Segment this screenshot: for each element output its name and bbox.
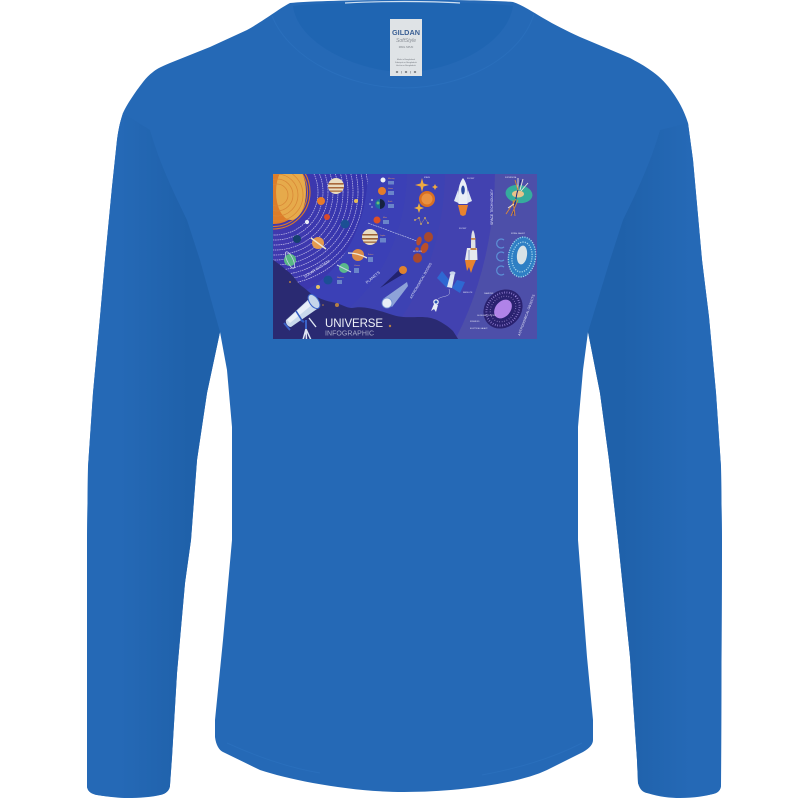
satellite body — [447, 272, 455, 288]
printed infographic panel — [273, 174, 537, 339]
planet labels: Earth — [388, 200, 392, 203]
astronomical objects — [470, 176, 539, 337]
planet: saturn — [348, 249, 367, 261]
label origin text 2: Fabriqué au Bangladesh — [395, 62, 417, 64]
neck opening — [293, 2, 513, 72]
dark hill — [270, 258, 460, 342]
small stars — [289, 281, 391, 327]
telescope tripod — [303, 329, 311, 340]
label style: SoftStyle — [396, 38, 416, 44]
planet: mars — [374, 216, 380, 224]
label: astronomical objects: ASTRONOMICAL OBJECTS — [517, 293, 536, 336]
planet: mercury — [305, 220, 309, 224]
satellite panel right — [452, 280, 465, 293]
band: astronomical bodies — [91, 0, 445, 395]
star small — [432, 184, 438, 190]
astronomical bodies — [413, 176, 438, 263]
planet: neptune — [324, 276, 332, 284]
spiral galaxy — [505, 235, 539, 279]
astronaut — [431, 289, 450, 312]
planet: uranus — [337, 263, 351, 273]
band: space technology — [402, 174, 495, 336]
comet white — [382, 282, 408, 308]
t-shirt — [87, 0, 722, 798]
planet: jupiter — [362, 229, 378, 245]
elliptical galaxy labels — [470, 292, 496, 330]
supernova label: SUPERNOVA — [505, 176, 517, 179]
solar system planets — [283, 178, 358, 269]
divider line to asteroids — [368, 223, 417, 241]
right sleeve shading — [588, 123, 722, 797]
telescope mount — [298, 318, 306, 329]
collar highlight — [345, 2, 460, 3]
elliptical galaxy — [475, 281, 531, 337]
label: space technology: SPACE TECHNOLOGY — [490, 188, 494, 225]
band: planets — [129, 0, 407, 340]
label brand: GILDAN — [392, 28, 420, 37]
orbit lines — [273, 174, 368, 282]
planet: neptune — [340, 220, 350, 228]
planet: earth — [293, 235, 301, 243]
label: solar system: SOLAR SYSTEM — [303, 259, 330, 279]
asteroid label: METEORS — [413, 251, 423, 253]
neck label — [390, 19, 422, 76]
collar rib edge — [272, 14, 534, 88]
planet labels: Uranus — [354, 265, 360, 267]
satellite — [437, 271, 473, 294]
planet labels: Jupiter — [380, 234, 386, 237]
label origin text 3: Hecho en Bangladesh — [396, 65, 416, 67]
planet: venus — [378, 187, 386, 195]
telescope — [284, 281, 391, 340]
rocket two — [465, 230, 478, 273]
planet: jupiter — [328, 178, 344, 194]
telescope band — [296, 311, 303, 322]
planet fact lines — [337, 181, 394, 284]
spiral galaxy label: SPIRAL GALAXY — [511, 232, 526, 235]
panel background: astronomical objects band — [456, 174, 537, 339]
elliptical galaxy labels: ELLIPTICAL GALAXY — [470, 327, 488, 330]
telescope rod — [309, 318, 316, 327]
planet: mercury — [380, 178, 386, 182]
title — [325, 318, 383, 338]
rocket one — [454, 178, 472, 216]
band: solar system — [279, 174, 368, 288]
rocket one label: ROCKET — [467, 178, 475, 180]
planet: pluto — [316, 285, 320, 289]
elliptical galaxy labels: DIAMETER — [484, 292, 494, 295]
planet: earth — [375, 199, 385, 209]
planet: mars — [324, 214, 330, 220]
planet: small yellow — [354, 199, 358, 203]
constellation — [414, 217, 429, 225]
planet: venus — [317, 197, 325, 205]
satellite label: SATELLITE — [463, 291, 473, 294]
rocket two label: ROCKET — [459, 228, 467, 230]
star label: STARS — [424, 176, 431, 179]
orange star body — [419, 191, 435, 207]
star — [415, 178, 429, 192]
planet labels: Venus — [388, 188, 393, 190]
telescope base band — [284, 323, 290, 330]
subtitle: infographic: INFOGRAPHIC — [325, 330, 374, 338]
satellite panel left — [437, 271, 450, 288]
progress rings — [497, 239, 504, 275]
hem stitching — [227, 743, 582, 775]
label: astronomical bodies: ASTRONOMICAL BODIES — [409, 262, 433, 300]
planet labels: Mercury — [388, 178, 395, 180]
label origin text: Made in Bangladesh — [397, 59, 415, 61]
star — [414, 203, 424, 213]
label spun: RING SPUN — [399, 45, 413, 49]
planet labels — [337, 178, 395, 279]
planet: saturn — [311, 237, 326, 249]
section labels — [303, 188, 536, 336]
rockets — [454, 178, 478, 273]
icon: sun — [273, 174, 311, 230]
elliptical galaxy labels: GLOBULAR CLUSTER — [477, 314, 496, 317]
planet labels: Neptune — [337, 276, 344, 279]
supernova — [504, 178, 534, 216]
telescope tube highlight — [287, 299, 313, 323]
telescope lens — [306, 292, 322, 311]
planet labels: Mars — [383, 217, 387, 219]
moons — [369, 199, 373, 208]
label: planets: PLANETS — [365, 270, 381, 285]
satellite head — [450, 271, 456, 275]
planet: uranus — [284, 251, 296, 269]
title: universe: UNIVERSE — [325, 318, 383, 330]
comet orange — [380, 266, 407, 288]
asteroids — [413, 232, 433, 263]
planet labels: Saturn — [368, 253, 373, 256]
label sizes: M | M | M — [396, 70, 417, 74]
planets column — [316, 178, 395, 289]
telescope tube — [286, 298, 317, 327]
elliptical galaxy labels: SPHEROID — [470, 321, 480, 323]
shirt silhouette — [87, 0, 722, 798]
left sleeve shading — [87, 113, 220, 797]
